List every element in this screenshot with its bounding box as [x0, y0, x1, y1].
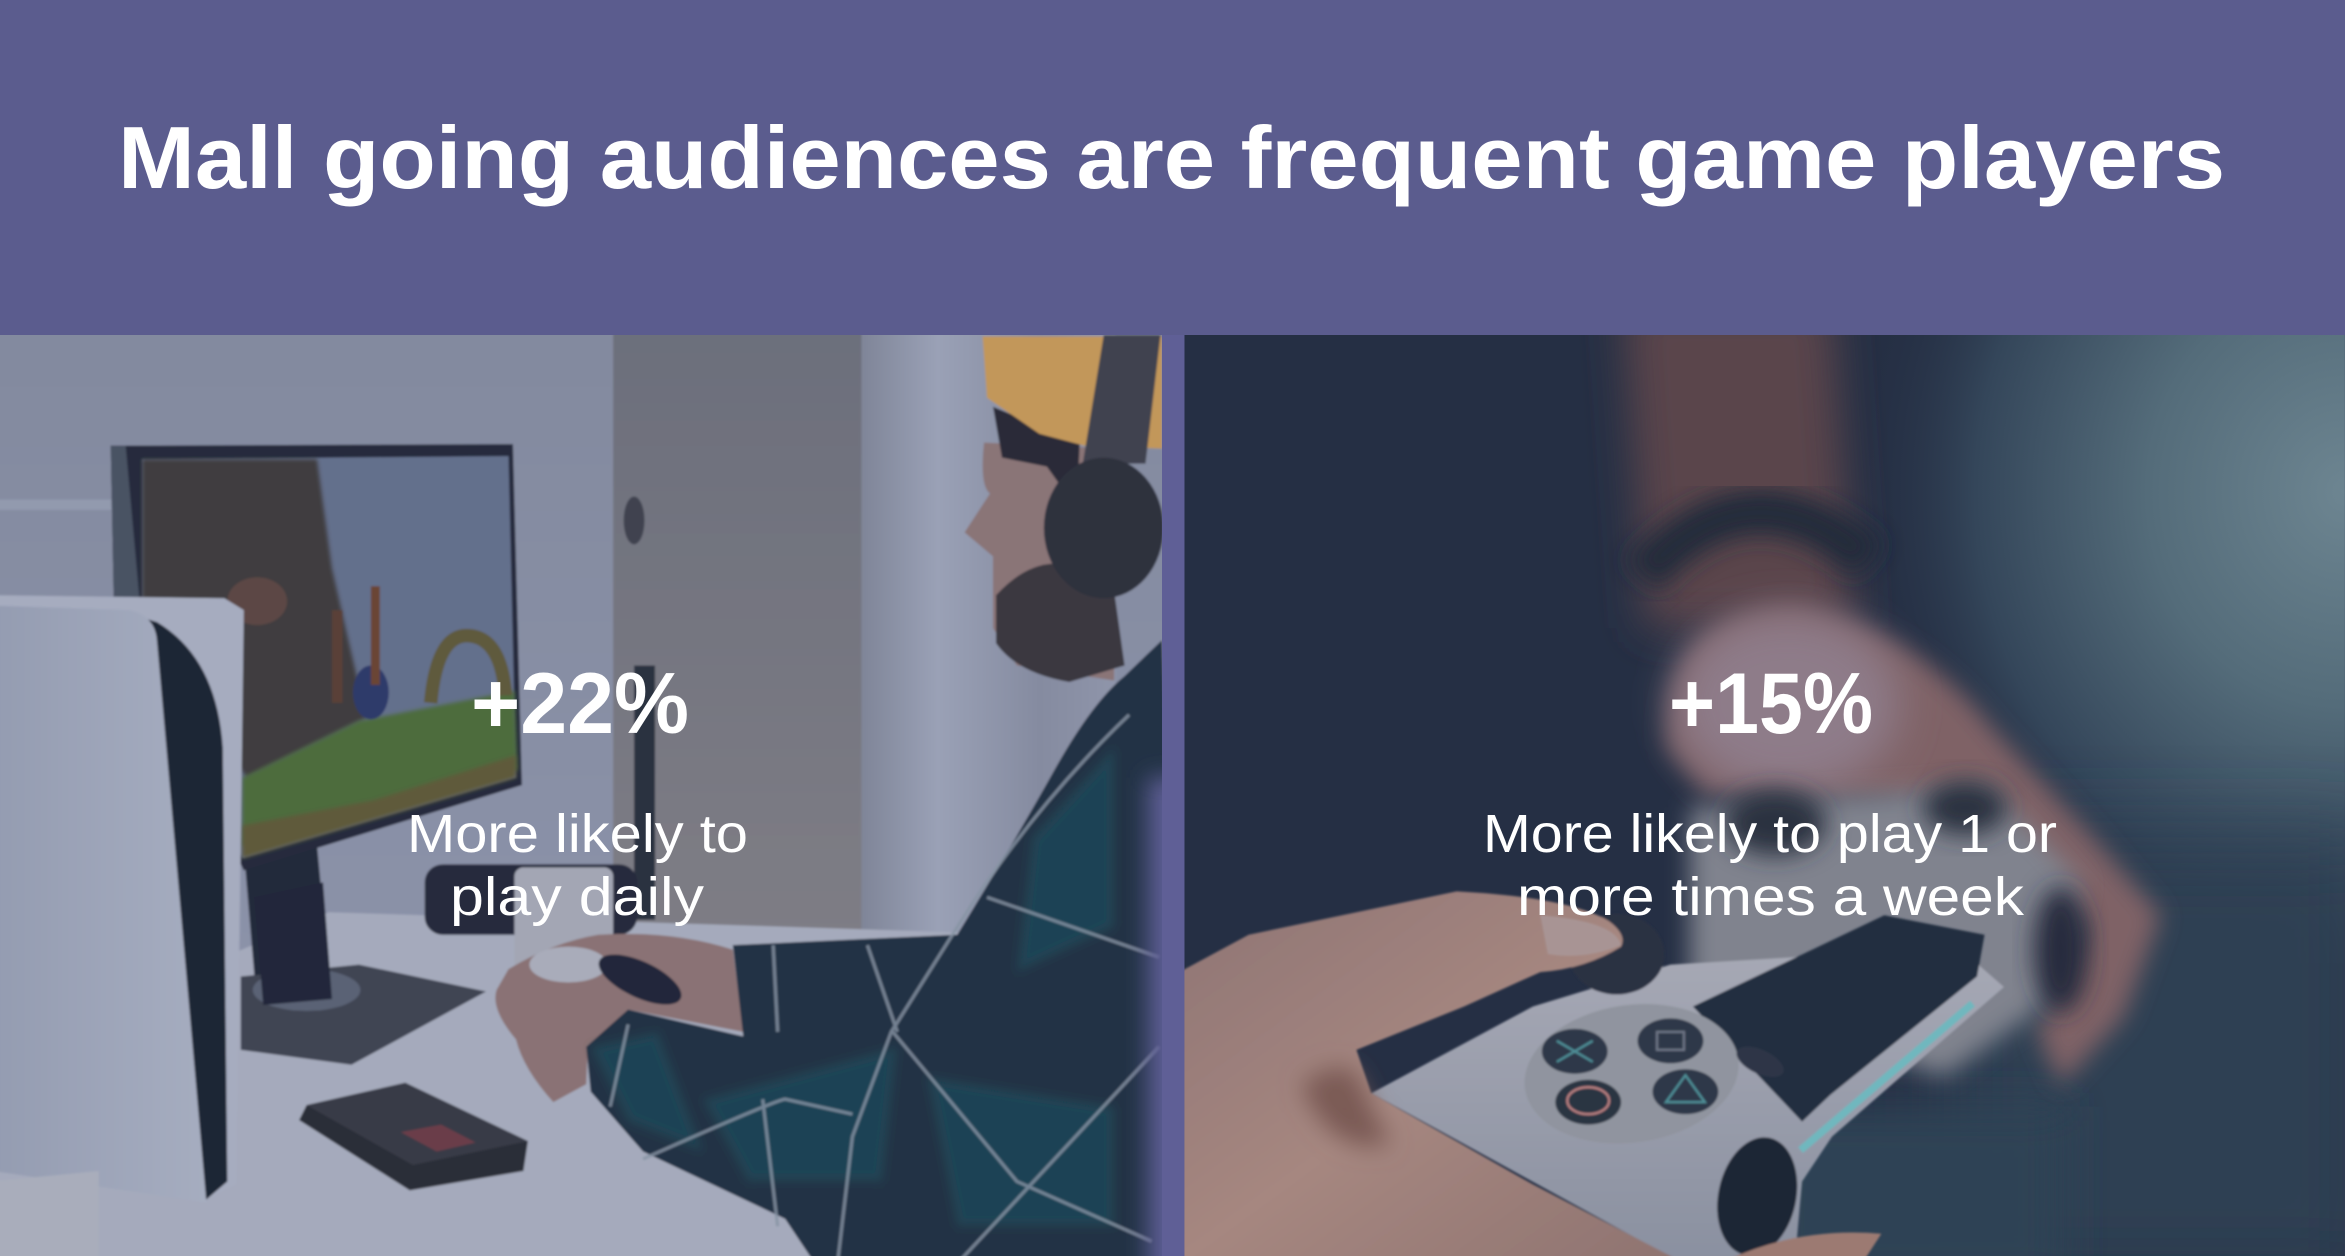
circle glyph: [1567, 1087, 1609, 1114]
line one: More likely to: [407, 804, 748, 864]
X button: [1542, 1029, 1608, 1074]
panel: right photo of hands on game controller: [1174, 299, 2345, 1256]
controller white shell: [529, 947, 607, 983]
option button: [1732, 1040, 1788, 1083]
thumbnail: [1540, 915, 1621, 956]
line two: play daily: [450, 867, 704, 927]
line two: more times a week: [1517, 867, 2025, 927]
dark backdrop: [1184, 335, 2345, 1256]
button cap: [1653, 1069, 1718, 1114]
totem: [332, 610, 342, 703]
face: [965, 443, 1114, 680]
right analog stick: [1707, 1130, 1808, 1256]
light bar: [1801, 1003, 1973, 1150]
stand neck: [254, 882, 332, 1005]
stat description: right: [1483, 804, 2057, 927]
line one: More likely to play 1 or: [1483, 804, 2057, 864]
near hand and thumb: [1174, 891, 1685, 1256]
box top: [307, 1083, 528, 1165]
shirt plaid lines: [610, 715, 1159, 1256]
dark tripod: [634, 665, 655, 920]
circle button: [1555, 1080, 1621, 1125]
forearm: [1623, 299, 1854, 628]
desk: [0, 912, 987, 1256]
curtain: [861, 329, 1116, 942]
shirt: [586, 640, 1181, 1256]
far stick: [1724, 790, 1826, 855]
console back plate: [0, 594, 246, 957]
wrist band: [1642, 512, 1869, 576]
console front plate: [0, 606, 206, 1202]
arc figure: [227, 577, 287, 625]
right-edge fade: [1149, 778, 1208, 1256]
stat: +22%: +22%: [471, 656, 689, 752]
character: [353, 665, 389, 719]
button cap: [1542, 1029, 1608, 1074]
console black core: [148, 618, 229, 1200]
touchpad: [1693, 915, 1985, 1122]
label: [401, 1125, 476, 1152]
square button: [1638, 1018, 1703, 1063]
square glyph: [1657, 1032, 1684, 1050]
monitor frame: [111, 444, 522, 870]
far grip: [2034, 887, 2088, 1012]
left analog stick: [1569, 914, 1664, 995]
triangle glyph: [1666, 1075, 1705, 1102]
cable box: [425, 864, 637, 935]
pale palm: [1675, 613, 1899, 793]
shirt teal patches: [591, 748, 1114, 1226]
room wall: [0, 335, 1162, 951]
header band: [0, 0, 2345, 335]
controller: [529, 944, 688, 1015]
trees: [142, 459, 366, 778]
stat description: left: [407, 804, 748, 927]
slate bottom centre: [1765, 1107, 2064, 1256]
SSD box: [299, 1083, 528, 1190]
wall panel seam: [0, 500, 112, 510]
button cap: [1638, 1018, 1703, 1063]
palm shadow: [1301, 1067, 1391, 1147]
controller dark grip: [592, 944, 688, 1015]
monitor stand: [244, 846, 322, 977]
hair: [993, 407, 1080, 508]
door handle: [624, 497, 645, 544]
hands: [495, 934, 743, 1102]
headband: [1083, 335, 1161, 464]
ear cup: [1044, 458, 1163, 598]
far stick two: [1923, 781, 2007, 834]
cap: [983, 336, 1162, 449]
slate mid right: [1944, 837, 2345, 1256]
lower finger: [1720, 1233, 1881, 1256]
teal light top right: [1765, 335, 2345, 963]
monitor left bezel: [110, 446, 140, 597]
beard: [996, 564, 1125, 682]
totem two: [371, 586, 380, 685]
box body: [298, 1104, 529, 1192]
small box: [41, 1172, 98, 1186]
monitor screen: [142, 456, 517, 858]
title: Mall going audiences are frequent game players: [118, 108, 2225, 207]
panel: left photo of gamer at desk: [0, 329, 1208, 1256]
blurred backdrop tones: [1623, 299, 2345, 1256]
blurred controller far side: [1690, 785, 2082, 1077]
arch: [431, 636, 505, 703]
triangle button: [1653, 1069, 1718, 1114]
door: [613, 329, 864, 935]
mug: [514, 867, 613, 975]
sky: [142, 456, 516, 858]
path: [242, 755, 516, 858]
monitor base: [241, 965, 486, 1065]
button cap: [1555, 1080, 1621, 1125]
controller body: [1371, 935, 2004, 1256]
blurred hand: [1667, 606, 2161, 1086]
grass: [242, 691, 517, 846]
cross glyph: [1557, 1041, 1593, 1062]
button disk: [1515, 991, 1748, 1157]
stand ring: [253, 969, 360, 1011]
stat: +15%: +15%: [1669, 656, 1873, 752]
